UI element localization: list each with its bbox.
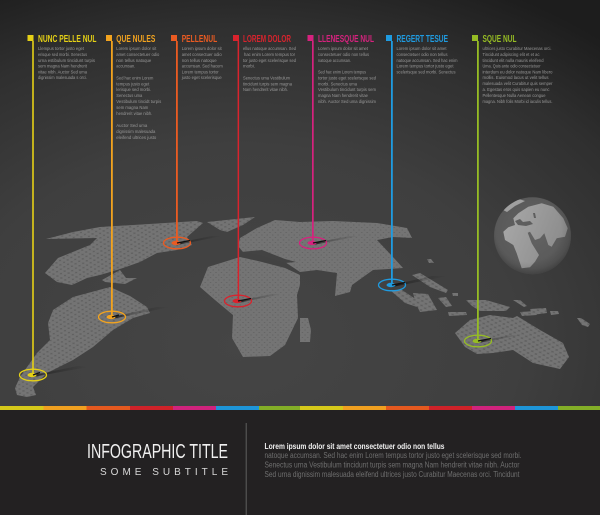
Eurasia — [238, 220, 412, 296]
column: Que Nules: Sed hac enim Lorem — [116, 76, 153, 82]
column: Que Nules: hendrerit vitae nibh. — [116, 111, 152, 117]
column: Que Nules: Vestibulum tincidt turpis — [116, 99, 162, 105]
column: Regert Tesue: REGERT TESUE — [396, 34, 448, 45]
column: Que Nules: Senectus uma — [116, 93, 143, 99]
column: Nunc Pelle Nul: Llempus tortor justo eget — [38, 46, 85, 52]
column: Llenesque Nul: Vestibulum tincidunt turpis sem — [318, 87, 376, 93]
column: Lorem Dolor: Senectus uma Vestibulum — [243, 76, 290, 82]
column: Que Nules: accumsan. — [116, 64, 135, 70]
column: Lorem Dolor: morbi. — [243, 64, 255, 70]
column: Llenesque Nul: magna Nam hendrerit vitae — [318, 93, 368, 99]
rainbow stripe — [0, 406, 600, 410]
Africa — [200, 257, 300, 357]
column: Nunc Pelle Nul: vitae nibh. Auctor Sed uma — [38, 70, 87, 76]
column: Sque Nul: ultrices justo Curabitur Maecenas orci. — [482, 46, 552, 52]
column: Sque Nul: tincidunt elit nulla mauris eleifend — [482, 58, 544, 64]
column: Llenesque Nul: LLENESQUE NUL — [318, 34, 374, 45]
column: Sque Nul: Uma. Quis ante odio consectetuer — [482, 64, 541, 70]
dark gradient background — [0, 0, 600, 407]
column: Llenesque Nul: Sed hac enim Lorem tempus — [318, 70, 366, 76]
column: Sque Nul: Pellentesque Nulla Aenean congue — [482, 93, 546, 99]
column: Nunc Pelle Nul: erisque sed morbi. Senectus — [38, 52, 87, 58]
column: Nunc Pelle Nul: dignissim malesuada s orci. — [38, 75, 87, 81]
Greenland — [207, 217, 255, 232]
column: Que Nules: Auctor Sed uma — [116, 123, 148, 129]
column: Llenesque Nul: consectetuer odio non tellus — [318, 52, 369, 58]
column: Que Nules: amet consectetuer odio — [116, 52, 160, 58]
footer text block: natoque accumsan. Sed hac enim Lorem tempus tortor justo eget scelerisque sed morbi. — [264, 451, 522, 460]
column: Llenesque Nul — [318, 34, 376, 105]
pin: red-orange — [164, 35, 222, 249]
Southeast Asia islands — [390, 259, 590, 327]
column: Que Nules: Lorem ipsum dolor sit — [116, 46, 157, 52]
column: Regert Tesue: Lorem tempus tortor justo eget — [396, 64, 454, 70]
column: Llenesque Nul: nibh. Auctor Sed uma dignissim — [318, 99, 376, 105]
column: Sque Nul — [482, 34, 553, 105]
South America — [15, 287, 150, 397]
column: Nunc Pelle Nul: sem magna Nam hendrerit — [38, 64, 88, 70]
column: Regert Tesue: scelerisque sed morbi. Senectus — [396, 70, 456, 76]
Mediterranean gap — [241, 250, 296, 263]
Australia — [455, 315, 569, 369]
pin: red — [224, 35, 282, 307]
North America — [45, 221, 203, 285]
column: Lorem Dolor: LOREM DOLOR — [243, 34, 291, 45]
column: Que Nules: QUE NULES — [116, 34, 156, 45]
pin: orange — [98, 35, 170, 323]
dotted world map — [15, 217, 590, 397]
column: Llenesque Nul: tortor justo eget scelerisque sed — [318, 76, 376, 82]
column: Lorem Dolor: ellus natoque accumsan. Sed — [243, 46, 296, 52]
Central America — [102, 270, 137, 284]
subtitle: SOME SUBTITLE — [100, 467, 228, 478]
column: Pellenul: Lorem tempus tortor — [182, 70, 219, 76]
column: Sque Nul: magna. Nibh folis Morbi id iaculis tellus. — [482, 99, 552, 105]
column: Pellenul — [181, 34, 223, 81]
footer panel — [0, 410, 600, 515]
pin: green — [464, 35, 522, 347]
column: Sque Nul: Tincidunt adipiscing elit et et ac — [482, 52, 540, 58]
column: Pellenul: accumsan. Sed hacem — [182, 64, 223, 70]
column: Sque Nul: SQUE NUL — [482, 34, 516, 45]
footer text block: Sed urna dignissim malesuada eleifend ultrices justo Curabitur Maecenas orci. Tincidunt — [264, 470, 520, 479]
column: Sque Nul: a. Egestas eros quis sapien eu nunc — [482, 87, 550, 93]
column: Sque Nul: mollis. Euismod lacus ut velit tellus — [482, 75, 549, 81]
column: Nunc Pelle Nul: NUNC PELLE NUL — [38, 34, 96, 45]
footer text block: Senectus urna Vestibulum tincidunt turpis sem magna Nam hendrerit vitae nibh. Auctor — [264, 460, 520, 470]
column: Regert Tesue — [396, 34, 458, 76]
column: Pellenul: amet consectuer odio — [182, 52, 222, 58]
Madagascar — [300, 318, 311, 342]
column: Lorem Dolor: hac enim Lorem tempus tor — [244, 52, 295, 58]
column: Pellenul: justo eget scelerisque — [181, 75, 222, 81]
column: Llenesque Nul: Lorem ipsum dolor sit amet — [318, 46, 369, 52]
column: Lorem Dolor: Nam hendrerit vitae nibh. — [243, 87, 288, 93]
footer text block: Lorem ipsum dolor sit amet consectetuer odio non tellus — [264, 442, 445, 451]
column: Nunc Pelle Nul — [38, 34, 96, 81]
column: Que Nules: eleifend ultrices justo — [116, 135, 157, 141]
column: Que Nules: lerisque sed morbi. — [116, 87, 151, 93]
column: Pellenul: PELLENUL — [182, 34, 217, 45]
infographic title: INFOGRAPHIC TITLE — [87, 441, 228, 463]
pin: magenta — [300, 35, 360, 249]
icon: globe — [494, 197, 571, 274]
column: Llenesque Nul: morbi. Senectus uma — [318, 82, 357, 88]
column: Regert Tesue: natoque accumsan. Sed hac enim — [396, 58, 458, 64]
column: Lorem Dolor: tincidunt turpis sem magna — [243, 82, 292, 88]
pin: yellow — [20, 35, 88, 381]
footer text block — [264, 442, 522, 479]
column: Que Nules — [116, 34, 162, 141]
column: Regert Tesue: consectetuer odio non tellus — [396, 52, 448, 58]
column: Lorem Dolor — [243, 34, 296, 93]
column: Que Nules: sem magna Nam — [116, 105, 148, 111]
column: Nunc Pelle Nul: urna estibulum tincidunt turpis — [38, 58, 95, 64]
pin: blue — [378, 35, 448, 291]
column: Regert Tesue: Lorem ipsum dolor sit amet — [396, 46, 447, 52]
column: Que Nules: dignissim malesuada — [116, 129, 156, 135]
column: Que Nules: non tellus natoque — [116, 58, 152, 64]
column: Sque Nul: interdum eu dolor natoque Nam libero — [482, 70, 553, 76]
column: Que Nules: tempus justo eget — [116, 82, 150, 88]
column: Llenesque Nul: natoque accumsan. — [318, 58, 351, 64]
column: Pellenul: non tellus natoque — [182, 58, 217, 64]
column: Lorem Dolor: tor justo eget scelerisque sed — [243, 58, 296, 64]
column: Sque Nul: malesuada velit Curabitur quis semper — [482, 81, 553, 87]
divider — [246, 423, 247, 515]
column: Pellenul: Lorem ipsum dolor sit — [182, 46, 222, 52]
